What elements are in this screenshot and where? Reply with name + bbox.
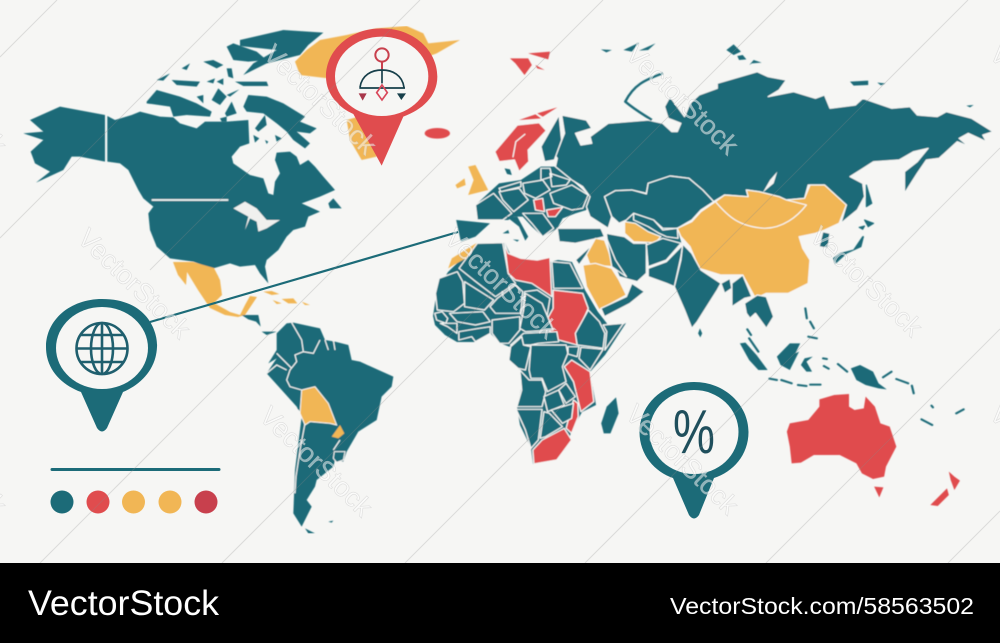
Sumatra [740, 343, 768, 370]
Borneo [777, 343, 800, 370]
Central Sahel [520, 293, 553, 332]
Somalia [603, 323, 623, 350]
world map [23, 26, 993, 533]
West Africa [435, 312, 490, 342]
New Guinea [851, 365, 887, 389]
Afghanistan [646, 238, 681, 267]
legend dots [50, 490, 218, 514]
Australia [787, 394, 896, 479]
Libya [505, 243, 552, 297]
Mauritania and Mali [435, 272, 465, 312]
region: Eurasia [435, 43, 993, 330]
pin: percent marker [640, 382, 748, 518]
Mexico [173, 262, 257, 317]
legend rule [52, 468, 219, 471]
Arctic islands [240, 30, 323, 75]
Greenland [295, 26, 460, 160]
small island chains [747, 308, 964, 425]
watermark text: VectorStock [620, 399, 745, 521]
Malawi [559, 383, 575, 403]
Russia [554, 72, 993, 228]
region: North America [23, 26, 460, 283]
Egypt [552, 262, 583, 288]
Sulawesi [801, 357, 813, 372]
icon: branching mobile symbol [359, 48, 406, 101]
Gulf states [601, 233, 645, 317]
region: Southern Africa and Oceania [435, 290, 964, 506]
country borders [267, 323, 340, 493]
France [475, 193, 512, 220]
Alaska [23, 107, 105, 183]
Sri Lanka [698, 328, 702, 337]
Sudan and South Sudan [544, 290, 588, 345]
Saudi Arabia [583, 263, 626, 310]
Japan [834, 185, 874, 263]
Novaya Zemlya [625, 73, 663, 120]
Ireland [455, 178, 466, 188]
Central Asia [634, 213, 678, 238]
Central America [242, 315, 277, 335]
DR Congo [529, 345, 568, 392]
watermark text: VectorStock [72, 223, 197, 345]
region: South America [242, 291, 393, 533]
watermark text: VectorStock [258, 39, 383, 161]
Norway and Sweden [495, 123, 546, 172]
Denmark [505, 168, 512, 175]
Italy [503, 217, 528, 242]
Caribbean islands [263, 291, 310, 305]
Kenya [579, 347, 603, 370]
Zambia [544, 390, 564, 412]
Algeria [459, 243, 515, 297]
Spain [456, 220, 490, 242]
Central African Republic [511, 332, 559, 345]
Central Asia landmass [626, 214, 682, 244]
Paraguay [332, 425, 344, 438]
Morocco [448, 243, 477, 268]
footer brand: VectorStock [28, 584, 220, 623]
Uruguay [333, 452, 345, 462]
watermark text: VectorStock [254, 401, 379, 523]
Kazakhstan [605, 176, 714, 228]
Levant [575, 245, 592, 265]
Great Lakes [233, 202, 280, 232]
Germany [499, 188, 528, 212]
Uganda [568, 347, 579, 357]
pin: hierarchy icon in red marker [326, 28, 437, 166]
southern islands [305, 521, 333, 533]
Africa landmass [433, 243, 626, 464]
South Africa [533, 428, 572, 464]
Canada-USA border [152, 197, 228, 202]
Nigeria [492, 317, 520, 343]
Balkans [523, 213, 554, 237]
watermark text: VectorStock [439, 223, 564, 345]
legend [50, 470, 219, 514]
Bulgaria [546, 207, 563, 217]
northern cape [519, 107, 557, 120]
Tanzania [564, 360, 594, 412]
Poland [523, 180, 550, 198]
Chad [523, 290, 550, 330]
Romania [534, 198, 545, 212]
Angola [517, 370, 546, 407]
Indochina [745, 295, 774, 328]
Svalbard [510, 52, 550, 75]
Benelux [499, 182, 521, 192]
Mozambique [566, 400, 578, 433]
Arctic islands of Asia [601, 43, 974, 107]
red island [425, 128, 450, 139]
Pakistan [648, 245, 683, 287]
Tasmania [874, 487, 883, 497]
India [674, 244, 721, 328]
pin: globe marker [46, 299, 157, 432]
Iraq and Syria [586, 238, 614, 267]
continent [267, 323, 393, 527]
Zimbabwe [551, 403, 573, 423]
watermark text [0, 39, 1000, 523]
Canada and USA [107, 112, 335, 283]
Ukraine [550, 185, 588, 210]
UK [468, 165, 488, 195]
Norway-Sweden border [513, 134, 525, 157]
Lake Baikal [763, 172, 777, 193]
Turkey [557, 228, 605, 243]
New Zealand [930, 472, 960, 506]
footer image URL: VectorStock.com/58563502 [670, 593, 974, 619]
Mongolia border [715, 200, 806, 228]
Niger [490, 285, 523, 313]
Turkmenistan [625, 222, 661, 243]
Korea [819, 232, 830, 248]
Ethiopia [575, 310, 605, 348]
Europe landmass [475, 167, 590, 237]
Namibia [516, 409, 542, 448]
Bangladesh and Myanmar [721, 275, 752, 307]
China and Mongolia [677, 185, 846, 298]
footer bar [0, 563, 1000, 643]
Bolivia [300, 387, 337, 425]
Madagascar [601, 397, 619, 433]
Iran [606, 233, 646, 282]
Gabon and Congo [509, 337, 531, 370]
icon: globe [76, 323, 128, 374]
icon: percent sign: % [673, 397, 715, 467]
Botswana [540, 412, 562, 438]
Finland [541, 115, 562, 162]
connector line from globe pin to Europe [150, 232, 458, 322]
watermark text: VectorStock [620, 39, 745, 161]
Baltic states [541, 168, 570, 187]
watermark text: VectorStock [804, 221, 929, 343]
